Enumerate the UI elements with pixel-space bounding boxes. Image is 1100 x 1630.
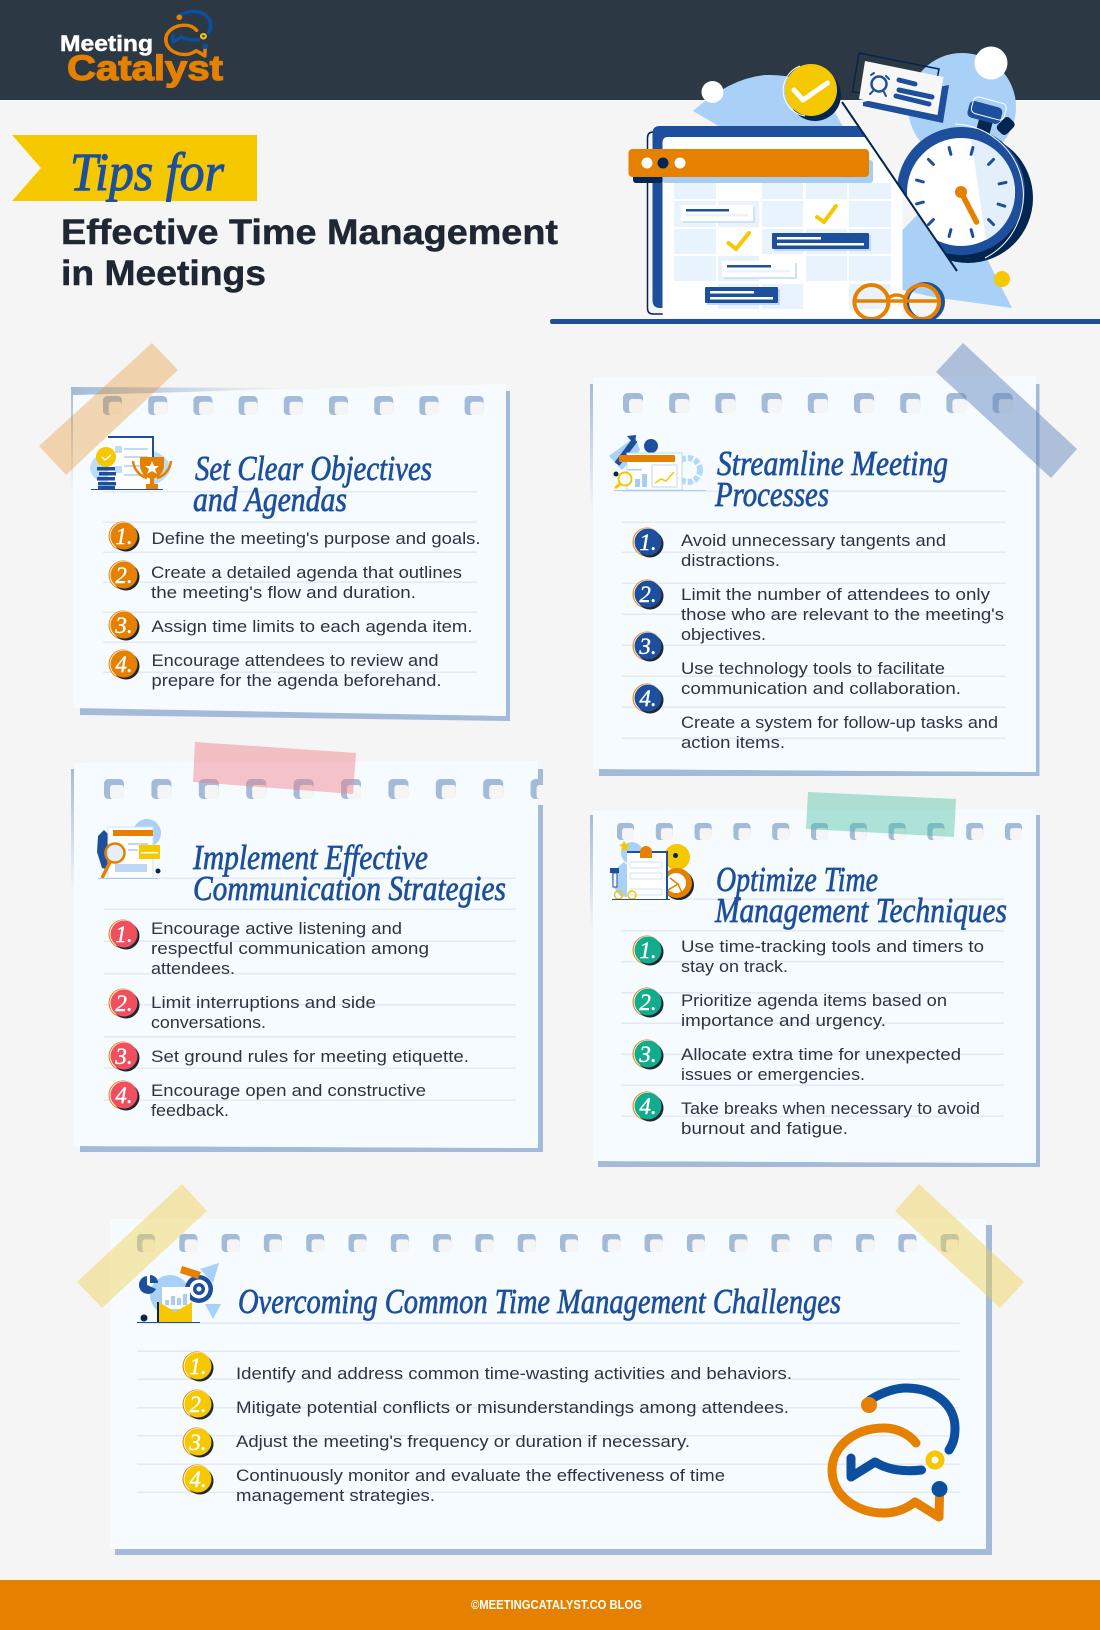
- badge 2: 2.: [189, 1392, 207, 1417]
- badge 4: 4.: [115, 1083, 133, 1108]
- icon: envelope and target: [137, 1263, 221, 1323]
- main title: Effective Time Management: [61, 213, 558, 252]
- list text: importance and urgency.: [681, 1011, 886, 1030]
- base line: [550, 319, 1100, 324]
- paper sheet: [590, 376, 1040, 776]
- logo word: Catalyst: Catalyst: [67, 49, 223, 88]
- list text: Adjust the meeting's frequency or duration if necessary.: [236, 1432, 690, 1451]
- list text: respectful communication among: [151, 939, 429, 958]
- white and yellow dots: [702, 46, 1010, 287]
- list text: [236, 1364, 792, 1505]
- badge 2: [632, 580, 664, 610]
- list text: management strategies.: [236, 1486, 435, 1505]
- list text: burnout and fatigue.: [681, 1119, 848, 1138]
- icon: process chart: [609, 435, 706, 491]
- list text: Assign time limits to each agenda item.: [152, 617, 472, 636]
- tape right: [895, 1184, 1024, 1308]
- list text: Set ground rules for meeting etiquette.: [151, 1047, 469, 1066]
- list text: Limit interruptions and side: [151, 993, 376, 1012]
- check badge: [783, 64, 841, 121]
- heading: Set Clear Objectives: [195, 449, 432, 488]
- binder holes: [617, 823, 1022, 840]
- panel: streamline meeting processes: [590, 343, 1077, 776]
- badge 1: [182, 1352, 214, 1382]
- paper sheet: [590, 809, 1040, 1167]
- list text: Avoid unnecessary tangents and: [681, 531, 946, 550]
- alarm card: [852, 53, 949, 123]
- list text: [151, 919, 469, 1120]
- panel: implement effective communication strategies: [71, 742, 551, 1152]
- badge 3: [632, 1040, 664, 1070]
- badge 3: 3.: [638, 634, 657, 659]
- tape: [806, 792, 956, 837]
- tape: [936, 343, 1077, 478]
- tape: [193, 742, 356, 794]
- badge 1: 1.: [189, 1354, 207, 1379]
- badge 4: [108, 1080, 140, 1110]
- list text: action items.: [681, 733, 785, 752]
- footer bar: [0, 1580, 1100, 1630]
- badge 1: 1.: [639, 530, 657, 555]
- badge 3: 3.: [638, 1042, 657, 1067]
- ruled lines: [103, 491, 477, 673]
- calendar cards and checks: [681, 205, 871, 305]
- badge 1: [632, 936, 664, 966]
- paper sheet: [110, 1219, 992, 1555]
- badge 3: [632, 632, 664, 662]
- list text: Identify and address common time-wasting activities and behaviors.: [236, 1364, 792, 1383]
- list text: feedback.: [151, 1101, 229, 1120]
- glasses: [854, 284, 943, 320]
- heading: Management Techniques: [714, 891, 1007, 930]
- badge 4: 4.: [189, 1467, 207, 1492]
- badge 4: [632, 1092, 664, 1122]
- panel: overcoming common time management challenges: [77, 1184, 1024, 1555]
- main title: in Meetings: [61, 254, 266, 293]
- badge 2: 2.: [639, 582, 657, 607]
- badge 1: [108, 522, 140, 552]
- list text: Continuously monitor and evaluate the effectiveness of time: [236, 1466, 725, 1485]
- list text: Encourage attendees to review and: [152, 651, 438, 670]
- banner: Tips for: Tips for: [70, 142, 225, 202]
- list text: communication and collaboration.: [681, 679, 961, 698]
- badge 3: 3.: [188, 1430, 207, 1455]
- badge 3: 3.: [114, 1044, 133, 1069]
- logo: Meeting Catalyst: [60, 11, 223, 88]
- heading: [714, 860, 1007, 930]
- ruled lines: [137, 1322, 960, 1493]
- badge 4: 4.: [639, 686, 657, 711]
- badge 1: 1.: [115, 524, 133, 549]
- badge 2: [108, 988, 140, 1018]
- list text: Mitigate potential conflicts or misunderstandings among attendees.: [236, 1398, 789, 1417]
- badge 2: [182, 1390, 214, 1420]
- heading: Implement Effective: [192, 838, 428, 877]
- list text: Create a system for follow-up tasks and: [681, 713, 998, 732]
- footer text: ©MEETINGCATALYST.CO BLOG: [471, 1597, 642, 1612]
- badge 1: 1.: [115, 922, 133, 947]
- ruled lines: [621, 898, 1004, 1117]
- logo icon: [166, 11, 211, 56]
- ruled lines: [622, 490, 1006, 739]
- background blobs: [693, 53, 1016, 308]
- heading: [193, 449, 432, 519]
- header bar: [0, 0, 1100, 100]
- badge 4: 4.: [639, 1094, 657, 1119]
- list text: Create a detailed agenda that outlines: [151, 563, 462, 582]
- badge 1: 1.: [639, 938, 657, 963]
- badge 2: 2.: [115, 991, 133, 1016]
- logo word: Meeting: Meeting: [60, 31, 153, 56]
- paper sheet: [71, 384, 510, 721]
- list text: [681, 937, 984, 1138]
- list text: Use technology tools to facilitate: [681, 659, 945, 678]
- badge 1: [632, 528, 664, 558]
- binder holes: [103, 396, 484, 415]
- badge 4: [632, 684, 664, 714]
- badge 1: [108, 920, 140, 950]
- heading: Communication Strategies: [193, 869, 506, 908]
- list text: Encourage active listening and: [151, 919, 402, 938]
- badge 4: [108, 650, 140, 680]
- badge 2: [632, 988, 664, 1018]
- heading: Streamline Meeting: [717, 444, 948, 483]
- heading: Processes: [714, 475, 829, 514]
- list text: those who are relevant to the meeting's: [681, 605, 1004, 624]
- list text: Encourage open and constructive: [151, 1081, 426, 1100]
- main title: [61, 213, 558, 293]
- panel: set clear objectives and agendas: [39, 343, 510, 721]
- binder holes: [623, 393, 1013, 413]
- heading: [714, 444, 948, 514]
- list text: [151, 529, 480, 690]
- badge 3: [108, 1042, 140, 1072]
- badge 4: 4.: [115, 652, 133, 677]
- binder holes: [137, 1234, 959, 1252]
- banner: Tips for: [12, 135, 257, 202]
- list text: Take breaks when necessary to avoid: [681, 1099, 980, 1118]
- list text: conversations.: [151, 1013, 266, 1032]
- heading: and Agendas: [193, 480, 347, 519]
- hero illustration: calendar, stopwatch, glasses: [550, 46, 1100, 324]
- tape: [39, 343, 178, 475]
- icon: clipboard and stopwatch: [610, 841, 694, 900]
- list text: stay on track.: [681, 957, 788, 976]
- list text: Define the meeting's purpose and goals.: [152, 529, 480, 548]
- icon: documents and trophy: [90, 436, 171, 490]
- stopwatch: [897, 96, 1033, 263]
- badge 3: 3.: [114, 613, 133, 638]
- list text: Limit the number of attendees to only: [681, 585, 991, 604]
- list text: objectives.: [681, 625, 766, 644]
- badge 2: [108, 560, 140, 590]
- icon: chat logo mark: [832, 1388, 955, 1517]
- icon: magnifier and document: [97, 819, 161, 879]
- list text: Prioritize agenda items based on: [681, 991, 947, 1010]
- list text: [681, 531, 1004, 752]
- badge 4: [182, 1464, 214, 1494]
- list text: Allocate extra time for unexpected: [681, 1045, 961, 1064]
- calendar grid: [674, 183, 891, 309]
- ruled lines: [104, 878, 516, 1101]
- browser bar: [628, 149, 869, 177]
- badge 3: [182, 1428, 214, 1458]
- list text: attendees.: [151, 959, 235, 978]
- calendar frame: [633, 126, 902, 318]
- tape left: [77, 1184, 207, 1308]
- diagonal line: [842, 102, 957, 271]
- badge 2: 2.: [639, 990, 657, 1015]
- list text: the meeting's flow and duration.: [151, 583, 416, 602]
- heading: Optimize Time: [716, 860, 878, 899]
- badge 2: 2.: [115, 563, 133, 588]
- badge 3: [108, 610, 140, 640]
- panel: optimize time management techniques: [590, 792, 1040, 1167]
- list text: prepare for the agenda beforehand.: [152, 671, 442, 690]
- list text: issues or emergencies.: [681, 1065, 865, 1084]
- list text: distractions.: [681, 551, 780, 570]
- paper sheet: [71, 761, 543, 1152]
- binder holes: [104, 779, 551, 799]
- list text: Use time-tracking tools and timers to: [681, 937, 984, 956]
- heading: Overcoming Common Time Management Challenges: [238, 1282, 841, 1321]
- heading: [192, 838, 506, 908]
